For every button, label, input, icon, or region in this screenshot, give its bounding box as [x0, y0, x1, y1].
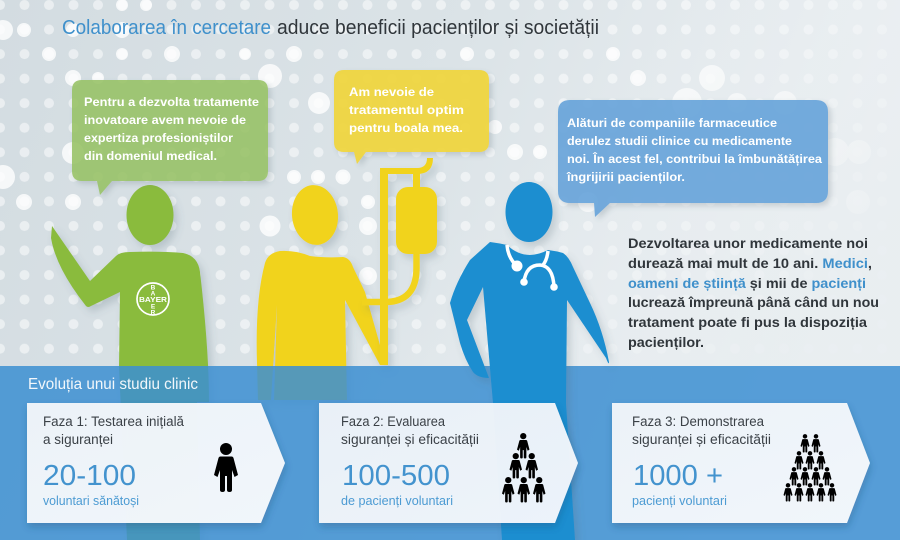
text block: development description: Dezvoltarea unor medicamente noi — [628, 235, 868, 251]
speech bubble: yellow: Am nevoie de — [349, 85, 434, 99]
text block: development description: lucrează împreună până când un nou — [628, 294, 879, 310]
logo: Bayer — [137, 283, 169, 316]
text block: development description: oameni de știință și mii de pacienți — [628, 275, 866, 291]
speech bubble: yellow — [334, 70, 489, 164]
title — [62, 17, 599, 39]
bottom band — [0, 366, 900, 540]
text block: development description: pacienților. — [628, 334, 704, 350]
logo: Bayer: E — [151, 304, 156, 310]
text block: development description — [628, 235, 879, 350]
panel: phase 1: voluntari sănătoși — [43, 494, 139, 508]
panel: phase 3: 1000 + — [633, 460, 723, 492]
speech bubble: blue: derulez studii clinice cu medicamente — [567, 134, 792, 148]
speech bubble: blue: noi. În acest fel, contribui la îmbunătățirea — [567, 151, 822, 166]
icon: one person — [214, 443, 238, 492]
speech bubble: yellow: pentru boala mea. — [349, 121, 463, 135]
panel: phase 2: Faza 2: Evaluarea — [341, 414, 445, 429]
logo: Bayer: R — [151, 310, 156, 316]
speech bubble: green: din domeniul medical. — [84, 149, 217, 163]
text block: development description: durează mai mult de 10 ani. Medici, — [628, 255, 872, 271]
speech bubble: green: inovatoare avem nevoie de — [84, 113, 246, 127]
logo: Bayer: B — [151, 284, 156, 292]
panel: phase 2 — [319, 403, 578, 523]
icon: stethoscope — [507, 245, 558, 291]
panel: phase 1: Faza 1: Testarea inițială — [43, 414, 184, 429]
figure: blue doctor — [450, 182, 609, 540]
panel: phase 1 — [27, 403, 285, 523]
panel: phase 3: Faza 3: Demonstrarea — [632, 414, 764, 429]
panel: phase 1: a siguranței — [43, 432, 113, 447]
speech bubble: blue — [558, 100, 828, 217]
panel: phase 3 — [612, 403, 870, 523]
icon: pyramid of six people — [502, 433, 545, 502]
title: aduce beneficii pacienților și societății — [277, 17, 599, 39]
panel: phase 2: de pacienți voluntari — [341, 494, 453, 508]
text block: development description: tratament poate fi pus la dispoziția — [628, 314, 867, 330]
icon: IV drip stand — [362, 158, 437, 365]
speech bubble: blue: Alături de companiile farmaceutice — [567, 116, 777, 130]
title: Colaborarea în cercetare — [62, 17, 271, 39]
icon: pyramid of fourteen people — [784, 434, 836, 501]
panel: phase 1: 20-100 — [43, 460, 136, 492]
logo: Bayer: BAYER — [139, 295, 168, 304]
section heading: Evoluția unui studiu clinic — [28, 376, 198, 393]
figure: yellow patient — [257, 183, 380, 400]
speech bubble: green: Pentru a dezvolta tratamente — [84, 95, 259, 109]
speech bubble: yellow: tratamentul optim — [349, 103, 464, 117]
panel: phase 3: pacienți voluntari — [632, 494, 727, 508]
speech bubble: blue: îngrijirii pacienților. — [566, 170, 685, 184]
logo: Bayer: A — [151, 290, 156, 298]
speech bubble: green: expertiza profesioniștilor — [84, 131, 233, 145]
panel: phase 2: 100-500 — [342, 460, 450, 492]
figure: green researcher — [51, 185, 209, 540]
panel: phase 2: siguranței și eficacității — [341, 432, 479, 447]
panel: phase 3: siguranței și eficacității — [632, 432, 771, 447]
speech bubble: green — [72, 80, 268, 195]
